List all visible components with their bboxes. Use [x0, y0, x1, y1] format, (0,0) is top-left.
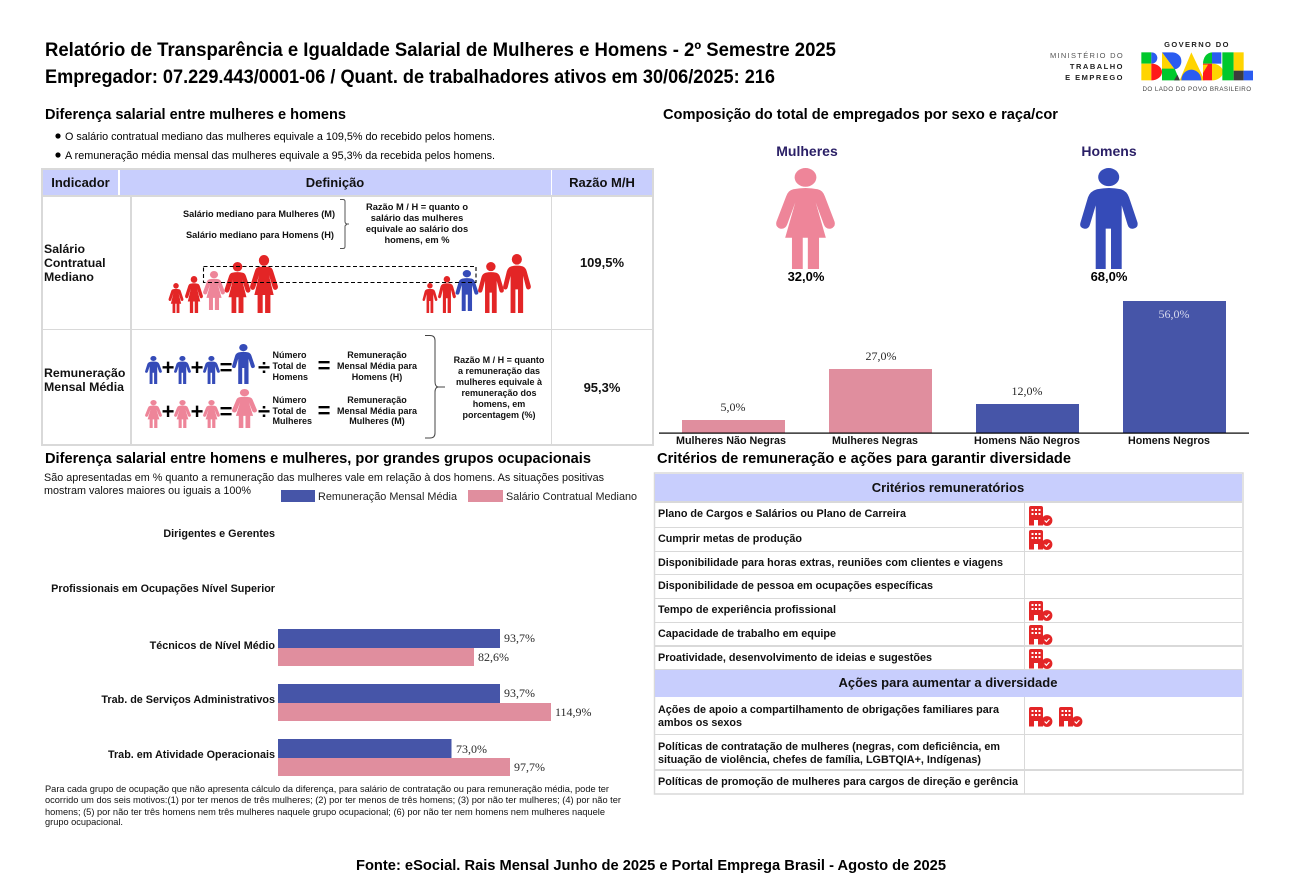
criteria list	[658, 508, 1003, 664]
formula: women: ÷	[258, 399, 270, 424]
actions list: situação de violência, chefes de família, LGBTQIA+, Indígenas)	[658, 754, 981, 766]
formula: men: =	[318, 353, 330, 378]
bar chart: grupos ocupacionais: 73,0%	[456, 742, 487, 756]
heading: critérios: Critérios de remuneração e ações para garantir diversidade	[657, 451, 1071, 467]
formula: men: Homens	[272, 372, 308, 382]
bar chart: grupos ocupacionais: 93,7%	[504, 631, 535, 645]
formula: men	[145, 344, 418, 384]
pictogram: mulheres	[776, 143, 838, 284]
formula: men: ÷	[258, 355, 270, 380]
bar chart: composição: Homens Não Negros	[974, 435, 1080, 447]
formula: women: +	[191, 399, 203, 424]
icons: men salary scale	[423, 254, 531, 313]
source note: Fonte: eSocial. Rais Mensal Junho de 2025 e Portal Emprega Brasil - Agosto de 2025	[356, 858, 946, 874]
formula: women: Mensal Média para	[337, 406, 418, 416]
bar chart: composição: 12,0%	[1012, 384, 1042, 398]
definition: salário mediano	[183, 200, 468, 248]
row label: remuneração mensal média: Remuneração	[44, 366, 126, 380]
formula: men: Mensal Média para	[337, 361, 418, 371]
bar chart: grupos ocupacionais: 93,7%	[504, 686, 535, 700]
footnote	[45, 784, 621, 827]
intro text: mostram valores maiores ou iguais a 100%	[44, 485, 251, 497]
actions list: Políticas de promoção de mulheres para cargos de direção e gerência	[658, 776, 1019, 788]
definition: razão remuneração: mulheres equivale à	[456, 377, 543, 387]
pictogram: homens: Homens	[1081, 143, 1137, 159]
title	[45, 40, 836, 88]
definition: salário mediano: salário das mulheres	[371, 213, 463, 223]
section header: ações: Ações para aumentar a diversidade	[839, 675, 1057, 690]
criteria list: Proatividade, desenvolvimento de ideias e sugestões	[658, 652, 932, 664]
bar chart: grupos ocupacionais: Trab. em Atividade Operacionais	[108, 749, 275, 761]
definition: razão remuneração	[425, 336, 545, 438]
formula: men: +	[162, 355, 174, 380]
logo: ministério	[1050, 51, 1124, 82]
definition: salário mediano: Salário mediano para Homens (H)	[186, 230, 334, 240]
definition: razão remuneração: remuneração dos	[461, 388, 537, 398]
formula: women: Mulheres (M)	[349, 416, 405, 426]
row label: salário contratual mediano: Salário	[44, 242, 85, 256]
median highlight box	[204, 266, 476, 282]
heading: composição: Composição do total de empregados por sexo e raça/cor	[663, 107, 1058, 123]
value: 109,5%: 109,5%	[580, 255, 624, 270]
row label: salário contratual mediano: Mediano	[44, 270, 94, 284]
bar chart: composição: Mulheres Negras	[832, 435, 918, 447]
bar chart: composição: 5,0%	[720, 400, 746, 414]
pictogram: mulheres: 32,0%	[788, 269, 825, 284]
formula: women: Remuneração	[347, 395, 407, 405]
criteria list: Capacidade de trabalho em equipe	[658, 628, 836, 640]
definition: razão remuneração: porcentagem (%)	[462, 410, 536, 420]
title: Empregador: 07.229.443/0001-06 / Quant. de trabalhadores ativos em 30/06/2025: 216	[45, 67, 775, 88]
pictogram: homens: 68,0%	[1091, 269, 1128, 284]
criteria list: Tempo de experiência profissional	[658, 604, 836, 616]
formula: men: Total de	[272, 361, 306, 371]
title: Relatório de Transparência e Igualdade Salarial de Mulheres e Homens - 2º Semestre 2025	[45, 40, 836, 61]
table header	[51, 175, 635, 190]
bar chart: composição: 27,0%	[866, 349, 896, 363]
criteria list: Disponibilidade para horas extras, reuniões com clientes e viagens	[658, 557, 1003, 569]
bar chart: composição: Mulheres Não Negras	[676, 435, 786, 447]
logo: governo do brasil	[1141, 40, 1253, 93]
bar chart: grupos ocupacionais: Profissionais em Ocupações Nível Superior	[51, 583, 276, 595]
footnote: Para cada grupo de ocupação que não apresenta cálculo da diferença, para salário de contratação ou para remuneração média, pode ter	[45, 784, 609, 794]
legend: Salário Contratual Mediano	[506, 491, 637, 503]
heading: grupos ocupacionais: Diferença salarial entre homens e mulheres, por grandes grupos ocupacionais	[45, 451, 591, 467]
bar chart: grupos ocupacionais: 82,6%	[478, 650, 509, 664]
heading: diferença salarial: Diferença salarial entre mulheres e homens	[45, 107, 346, 123]
icons: women salary scale	[169, 255, 278, 313]
definition: razão remuneração: homens, em	[473, 399, 525, 409]
definition: salário mediano: homens, em %	[384, 235, 450, 245]
intro text: São apresentadas em % quanto a remuneração das mulheres vale em relação à dos homens. As situações positivas	[44, 472, 605, 484]
bar chart: grupos ocupacionais: 97,7%	[514, 760, 545, 774]
section header: critérios remuneratórios: Critérios remuneratórios	[872, 480, 1024, 495]
bar chart: composição: 56,0%	[1158, 307, 1190, 321]
formula: women	[145, 389, 418, 428]
row label: salário contratual mediano: Contratual	[44, 256, 106, 270]
definition: salário mediano: Razão M / H = quanto o	[366, 202, 468, 212]
bar chart: grupos ocupacionais	[51, 528, 592, 776]
icons: critérios	[1029, 506, 1052, 669]
actions list: ambos os sexos	[658, 717, 742, 729]
pictogram: mulheres: Mulheres	[776, 143, 838, 159]
formula: women: Total de	[272, 406, 306, 416]
definition: razão remuneração: Razão M / H = quanto	[454, 355, 545, 365]
legend: Remuneração Mensal Média	[318, 491, 457, 503]
panel: critérios table	[654, 473, 1243, 794]
table header: Indicador	[51, 175, 110, 190]
summary bullets	[55, 131, 495, 162]
formula: women: =	[318, 398, 330, 423]
bar chart: grupos ocupacionais: Trab. de Serviços Administrativos	[101, 694, 275, 706]
logo: governo do brasil: DO LADO DO POVO BRASILEIRO	[1142, 86, 1252, 93]
formula: women: Número	[272, 395, 307, 405]
definition: razão remuneração: a remuneração das	[458, 366, 540, 376]
summary bullets: A remuneração média mensal das mulheres equivale a 95,3% da recebida pelos homens.	[65, 150, 495, 162]
pictogram: homens	[1080, 143, 1138, 284]
bar chart: composição: Homens Negros	[1128, 435, 1210, 447]
panel: indicator table	[42, 169, 653, 445]
actions list: Políticas de contratação de mulheres (negras, com deficiência, em	[658, 741, 1000, 753]
formula: men: +	[191, 355, 203, 380]
summary bullets: O salário contratual mediano das mulheres equivale a 109,5% do recebido pelos homens.	[65, 131, 495, 143]
bar chart: grupos ocupacionais: 114,9%	[555, 705, 592, 719]
icons: ações	[1029, 707, 1082, 727]
legend	[281, 490, 637, 503]
criteria list: Cumprir metas de produção	[658, 533, 802, 545]
criteria list: Plano de Cargos e Salários ou Plano de Carreira	[658, 508, 907, 520]
logo: ministério: TRABALHO	[1070, 62, 1124, 71]
formula: women: =	[220, 399, 232, 424]
bar chart: grupos ocupacionais: Técnicos de Nível Médio	[150, 640, 275, 652]
bar chart: composição	[659, 301, 1249, 447]
logo: ministério: MINISTÉRIO DO	[1050, 51, 1124, 60]
criteria list: Disponibilidade de pessoa em ocupações específicas	[658, 580, 933, 592]
actions list	[658, 704, 1019, 788]
actions list: Ações de apoio a compartilhamento de obrigações familiares para	[658, 704, 1000, 716]
logo: governo do brasil: GOVERNO DO	[1164, 40, 1230, 49]
value: 95,3%: 95,3%	[584, 380, 621, 395]
footnote: grupo ocupacional.	[45, 817, 123, 827]
formula: women: +	[162, 399, 174, 424]
table header: Razão M/H	[569, 175, 635, 190]
footnote: homens; (5) por não ter três homens nem três mulheres naquele grupo ocupacional; (6) por não ter nem homens nem mulheres naquele	[45, 807, 605, 817]
definition: salário mediano: Salário mediano para Mulheres (M)	[183, 209, 335, 219]
formula: women: Mulheres	[272, 416, 312, 426]
formula: men: Remuneração	[347, 350, 407, 360]
formula: men: Homens (H)	[352, 372, 402, 382]
footnote: ocorrido um dos seis motivos:(1) por ter menos de três mulheres; (2) por ter menos de três homens; (3) por não ter mulheres; (4) por não ter	[45, 795, 621, 805]
formula: men: =	[220, 355, 232, 380]
intro text	[44, 472, 605, 497]
row label: remuneração mensal média: Mensal Média	[44, 380, 124, 394]
bar chart: grupos ocupacionais: Dirigentes e Gerentes	[163, 528, 275, 540]
formula: men: Número	[272, 350, 307, 360]
logo: ministério: E EMPREGO	[1065, 73, 1124, 82]
definition: salário mediano: equivale ao salário dos	[366, 224, 468, 234]
table header: Definição	[306, 175, 364, 190]
